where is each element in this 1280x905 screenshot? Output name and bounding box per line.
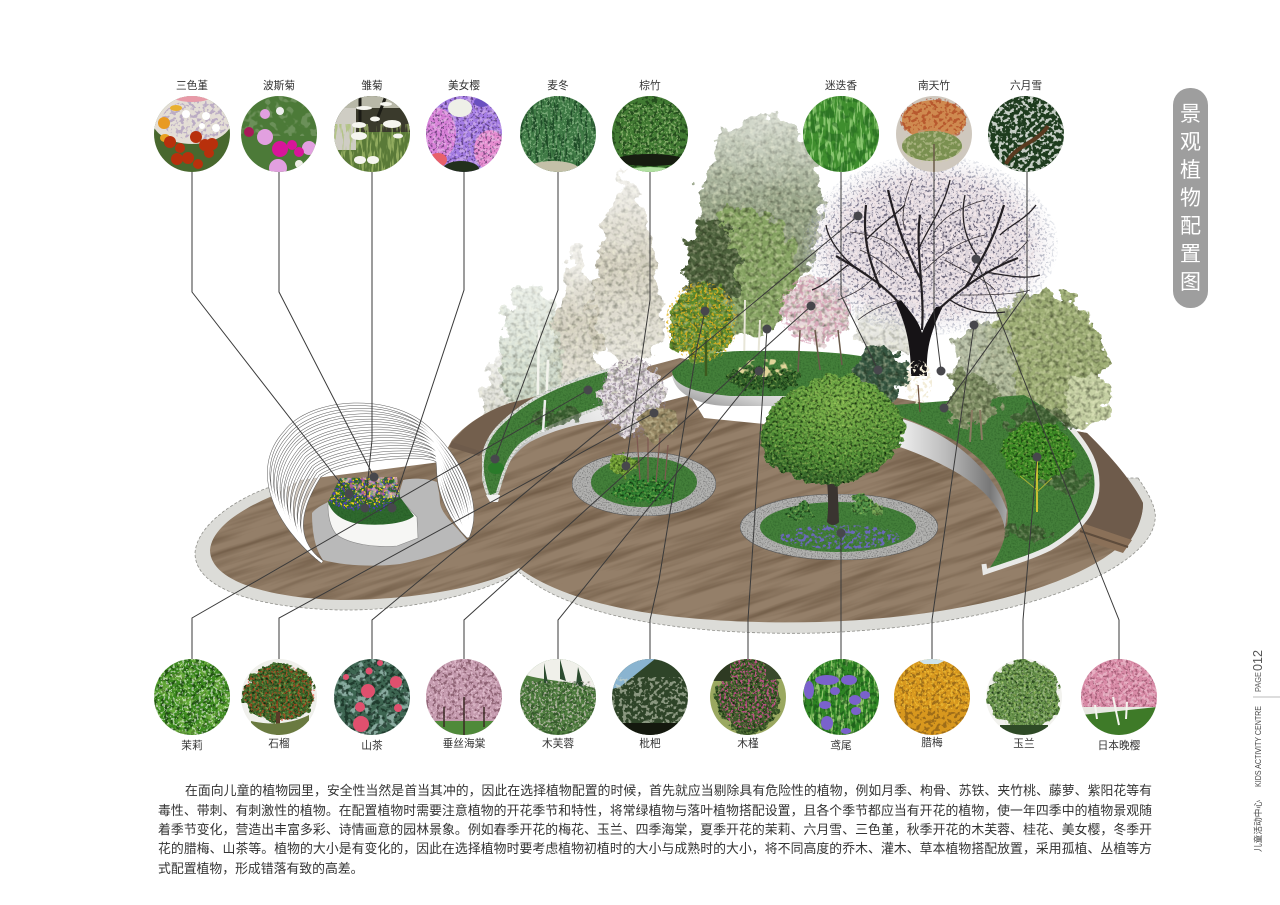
project title bbox=[1252, 706, 1263, 852]
deck curb bbox=[195, 478, 1155, 633]
plant label: 腊梅: 腊梅 bbox=[921, 736, 943, 749]
wooden deck bbox=[210, 358, 1143, 622]
title pill bbox=[1173, 88, 1208, 308]
description paragraph: 着季节变化，营造出丰富多彩、诗情画意的园林景象。例如春季开花的梅花、玉兰、四季海棠，夏季开花的茉莉、六月雪、三色堇，秋季开花的木芙蓉、桂花、美女樱，冬季开 bbox=[158, 822, 1152, 837]
plant photo: 波斯菊 bbox=[241, 96, 317, 172]
plant label: 枇杷: 枇杷 bbox=[639, 737, 661, 750]
page divider bbox=[1253, 696, 1280, 698]
plant label: 茉莉: 茉莉 bbox=[181, 739, 203, 752]
plant photo: 枇杷 bbox=[612, 659, 688, 735]
planter ring: right bbox=[740, 494, 938, 560]
title pill: 植 bbox=[1180, 159, 1201, 182]
plant photo: 雏菊 bbox=[334, 96, 410, 172]
title pill: 置 bbox=[1180, 243, 1201, 266]
page number: PAGE bbox=[1253, 672, 1263, 692]
plant photo: 鸢尾 bbox=[803, 659, 879, 735]
plant photo: 麦冬 bbox=[520, 96, 596, 177]
concrete pad bbox=[312, 479, 467, 566]
plant label: 玉兰: 玉兰 bbox=[1013, 737, 1035, 750]
description paragraph: 在面向儿童的植物园里，安全性当然是首当其冲的，因此在选择植物配置的时候，首先就应当剔除具有危险性的植物，例如月季、枸骨、苏铁、夹竹桃、藤萝、紫阳花等有 bbox=[185, 783, 1152, 798]
garden bed: right crescent bbox=[894, 395, 1097, 572]
plant label: 鸢尾: 鸢尾 bbox=[830, 739, 852, 752]
plant photo: 美女樱 bbox=[426, 96, 502, 172]
title pill: 图 bbox=[1180, 271, 1201, 294]
plant label: 美女樱: 美女樱 bbox=[448, 79, 480, 92]
garden bed: back island bbox=[672, 351, 895, 406]
plant label: 山茶: 山茶 bbox=[361, 739, 383, 752]
plant photo: 木芙蓉 bbox=[520, 659, 596, 735]
plant label: 南天竹: 南天竹 bbox=[918, 79, 950, 92]
pink flowering tree bbox=[779, 276, 851, 372]
plant photo: 棕竹 bbox=[612, 96, 688, 173]
project title: KIDS ACTIVITY CENTRE bbox=[1253, 706, 1263, 787]
plant label: 六月雪: 六月雪 bbox=[1010, 80, 1042, 92]
plant photo: 玉兰 bbox=[986, 659, 1062, 735]
plant label: 迷迭香: 迷迭香 bbox=[825, 80, 857, 92]
plant photo: 木槿 bbox=[710, 651, 786, 735]
blossom tree bbox=[802, 155, 1058, 376]
plant photo: 腊梅 bbox=[894, 659, 970, 735]
plant label: 垂丝海棠: 垂丝海棠 bbox=[443, 737, 486, 750]
title pill: 景 bbox=[1180, 103, 1201, 126]
pale pink shrub bbox=[598, 358, 674, 440]
project title: 儿童活动中心 bbox=[1252, 800, 1263, 852]
white gap behind the beds bbox=[600, 372, 790, 424]
plant label: 石榴: 石榴 bbox=[268, 737, 290, 750]
plant photo: 日本晚樱 bbox=[1081, 659, 1157, 735]
plant photo: 石榴 bbox=[241, 659, 317, 735]
flower planter bbox=[328, 477, 418, 547]
plant label: 波斯菊: 波斯菊 bbox=[263, 79, 295, 92]
plant photo: 迷迭香 bbox=[803, 96, 879, 172]
dark shrub bbox=[853, 343, 907, 401]
orange tree bbox=[666, 282, 738, 376]
title pill: 物 bbox=[1180, 187, 1201, 210]
right bed small trees bbox=[948, 372, 1073, 512]
dome pavilion bbox=[269, 404, 473, 562]
plant label: 麦冬: 麦冬 bbox=[547, 79, 569, 92]
title pill: 观 bbox=[1180, 131, 1201, 154]
plant photo: 茉莉 bbox=[154, 659, 230, 735]
flower mound on back island bbox=[726, 359, 798, 390]
description paragraph: 毒性、带刺、有刺激性的植物。在配置植物时需要注意植物的开花季节和特性，将常绿植物与落叶植物搭配设置，且各个季节都应当有开花的植物，使一年四季中的植物景观随 bbox=[158, 803, 1152, 818]
background trees bbox=[482, 115, 1110, 432]
title pill: 配 bbox=[1180, 215, 1201, 238]
plant photo: 六月雪 bbox=[988, 96, 1064, 172]
plant label: 三色堇: 三色堇 bbox=[176, 79, 208, 92]
plant label: 日本晚樱: 日本晚樱 bbox=[1098, 739, 1141, 752]
leader lines and markers bbox=[192, 172, 1119, 660]
illustration: planting plan scene bbox=[154, 80, 1280, 852]
description paragraph: 花的腊梅、山茶等。植物的大小是有变化的，因此在选择植物时要考虑植物初植时的大小与成熟时的大小，将不同高度的乔木、灌木、草本植物搭配放置，采用孤植、丛植等方 bbox=[158, 841, 1152, 856]
white magnolia sapling bbox=[904, 360, 932, 412]
garden bed: left crescent bbox=[482, 368, 640, 502]
plant label: 木芙蓉: 木芙蓉 bbox=[542, 737, 574, 750]
main foreground tree bbox=[761, 375, 904, 525]
plant photo: 三色堇 bbox=[154, 96, 230, 172]
page number: 012 bbox=[1251, 650, 1265, 671]
plant label: 棕竹: 棕竹 bbox=[639, 79, 661, 92]
page number bbox=[1251, 650, 1265, 692]
description paragraph bbox=[158, 783, 1152, 876]
planter ring: left bbox=[572, 436, 716, 516]
plant photo: 南天竹 bbox=[896, 96, 972, 172]
plant label: 雏菊: 雏菊 bbox=[361, 79, 383, 92]
plant photo: 山茶 bbox=[334, 659, 410, 735]
plant photo: 垂丝海棠 bbox=[426, 659, 502, 735]
plant label: 木槿: 木槿 bbox=[737, 737, 759, 750]
description paragraph: 式配置植物，形成错落有致的高差。 bbox=[158, 861, 364, 876]
